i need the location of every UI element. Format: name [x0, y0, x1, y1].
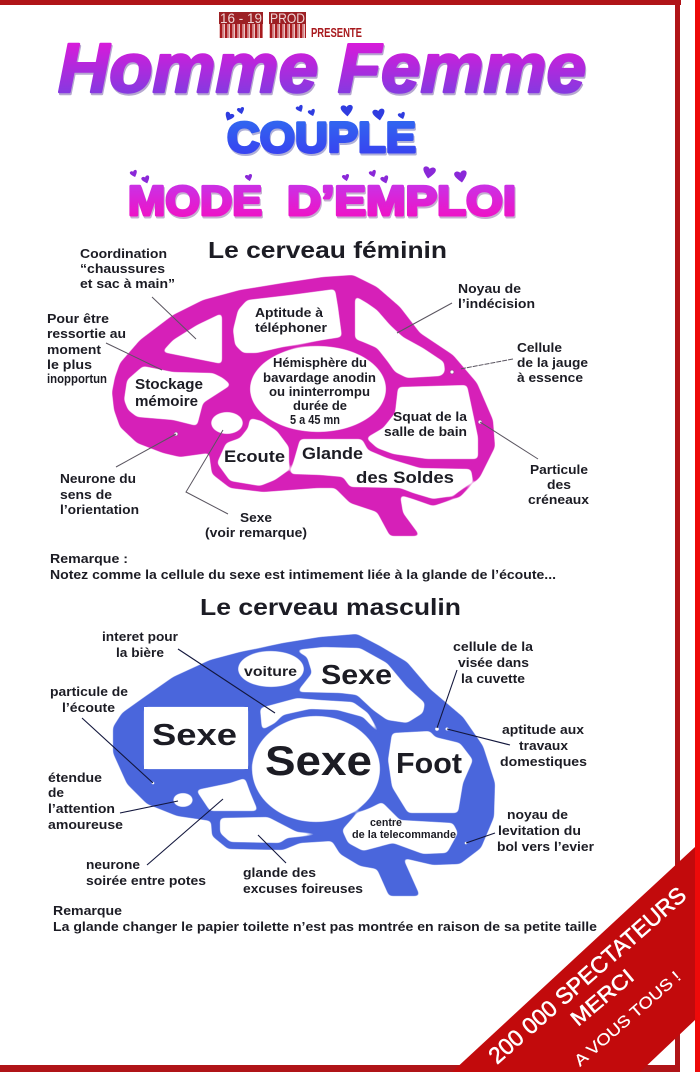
hearts above Couple	[223, 104, 406, 123]
callout labels: male brain: particule de	[50, 684, 128, 699]
callout labels: female brain: l’indécision	[458, 296, 535, 311]
callout labels: female brain: Coordination	[80, 246, 167, 261]
callout labels: female brain: Neurone du	[60, 471, 136, 486]
callout labels: male brain: neurone	[86, 857, 140, 872]
cell dots	[152, 727, 467, 844]
panel: female brain diagram	[106, 275, 538, 536]
callout labels: female brain: Pour être	[47, 311, 109, 326]
region labels: Aptitude à	[255, 305, 324, 320]
callout labels: female brain: et sac à main”	[80, 276, 175, 291]
region labels: Hémisphère du	[273, 355, 367, 370]
region labels: bavardage anodin	[263, 370, 376, 385]
callout labels: female brain: Sexe	[240, 510, 272, 525]
callout labels: female brain: le plus	[47, 357, 92, 372]
note: female brain remark	[50, 551, 556, 582]
region labels: Foot	[396, 748, 462, 780]
callout labels: male brain: levitation du	[498, 823, 581, 838]
subtitle: Mode d'emploi	[128, 177, 516, 224]
subtitle: Mode d'emploi: MODE	[128, 177, 262, 224]
callout labels: female brain: Noyau de	[458, 281, 521, 296]
callout labels: female brain: de la jauge	[517, 355, 588, 370]
region labels: Sexe	[265, 737, 372, 784]
callout labels: male brain: soirée entre potes	[86, 873, 206, 888]
note: female brain remark: Notez comme la cellule du sexe est intimement liée à la glande de l’écoute...	[50, 567, 556, 582]
callout labels: female brain: Cellule	[517, 340, 562, 355]
region labels: Glande	[302, 444, 363, 463]
region labels: salle de bain	[384, 424, 467, 439]
region labels: 5 a 45 mn	[290, 412, 340, 427]
leader lines	[106, 297, 538, 514]
region labels: téléphoner	[255, 320, 327, 335]
leader lines	[82, 649, 510, 865]
callout labels: male brain: excuses foireuses	[243, 881, 363, 896]
callout labels: male brain: aptitude aux	[502, 722, 585, 737]
region labels: Stockage	[135, 376, 203, 393]
region labels: Ecoute	[224, 447, 285, 466]
subtitle: Couple: COUPLE	[227, 114, 416, 162]
region labels: des Soldes	[356, 468, 454, 487]
callout labels: female brain: sens de	[60, 487, 112, 502]
hearts above Mode d'emploi	[129, 166, 468, 185]
heading: male brain: Le cerveau masculin	[200, 594, 461, 620]
region labels: Sexe	[321, 659, 392, 690]
callout labels: female brain: des	[547, 477, 571, 492]
callout labels: male brain: visée dans	[458, 655, 529, 670]
callout labels: female brain	[47, 246, 590, 540]
callout labels: female brain: (voir remarque)	[205, 525, 307, 540]
callout labels: female brain: “chaussures	[80, 261, 165, 276]
corner banner: 200 000 spectateurs: A VOUS TOUS !	[571, 969, 685, 1070]
cell dots	[174, 370, 482, 436]
title: Homme Femme: Homme Femme	[58, 29, 586, 107]
panel: male brain diagram	[82, 634, 510, 896]
corner banner: 200 000 spectateurs: MERCI	[566, 965, 639, 1031]
callout labels: male brain: amoureuse	[48, 817, 123, 832]
callout labels: female brain: ressortie au	[47, 326, 126, 341]
callout labels: male brain: étendue	[48, 770, 102, 785]
callout labels: male brain: interet pour	[102, 629, 178, 644]
callout labels: female brain: à essence	[517, 370, 583, 385]
note: male brain remark: Remarque	[53, 903, 122, 918]
region labels	[152, 659, 462, 841]
callout labels: female brain: créneaux	[528, 492, 590, 507]
callout labels: female brain: l’orientation	[60, 502, 139, 517]
note: male brain remark	[53, 903, 597, 934]
region labels: voiture	[244, 664, 298, 679]
note: male brain remark: La glande changer le papier toilette n’est pas montrée en raison de sa petite taille	[53, 919, 597, 934]
region labels: centre	[370, 817, 402, 829]
callout labels: male brain: noyau de	[507, 807, 568, 822]
region labels	[135, 305, 468, 487]
logo: 16-19 Prod barcode	[219, 10, 306, 38]
region labels: ou ininterrompu	[269, 384, 370, 399]
brain shape: male	[113, 634, 495, 896]
callout labels: female brain: inopportun	[47, 371, 107, 386]
callout labels: male brain: l’attention	[48, 801, 115, 816]
region labels: Squat de la	[393, 409, 468, 424]
callout labels: male brain: la bière	[116, 645, 164, 660]
heading: female brain: Le cerveau féminin	[208, 237, 447, 263]
logo: 16-19 Prod barcode: PROD	[270, 10, 305, 26]
callout labels: female brain: moment	[47, 342, 102, 357]
region labels: Sexe	[152, 717, 237, 752]
region labels: durée de	[293, 398, 347, 413]
subtitle: Mode d'emploi: D’EMPLOI	[287, 177, 516, 224]
callout labels: male brain: bol vers l’evier	[497, 839, 594, 854]
callout labels: male brain: travaux	[519, 738, 569, 753]
logo: 16-19 Prod barcode: 16 - 19	[220, 10, 262, 26]
corner banner: 200 000 spectateurs: 200 000 SPECTATEURS	[483, 882, 691, 1069]
callout labels: female brain: Particule	[530, 462, 588, 477]
presente label: PRESENTE	[311, 26, 362, 40]
region labels: de la telecommande	[352, 829, 456, 841]
callout labels: male brain	[48, 629, 594, 896]
callout labels: male brain: la cuvette	[461, 671, 525, 686]
note: female brain remark: Remarque :	[50, 551, 128, 566]
callout labels: male brain: l’écoute	[62, 700, 115, 715]
callout labels: male brain: de	[48, 785, 64, 800]
callout labels: male brain: cellule de la	[453, 639, 534, 654]
brain shape: female	[112, 275, 495, 536]
callout labels: male brain: glande des	[243, 865, 316, 880]
white region: rectangular Sexe	[144, 707, 248, 769]
region labels: mémoire	[135, 393, 198, 410]
callout labels: male brain: domestiques	[500, 754, 587, 769]
